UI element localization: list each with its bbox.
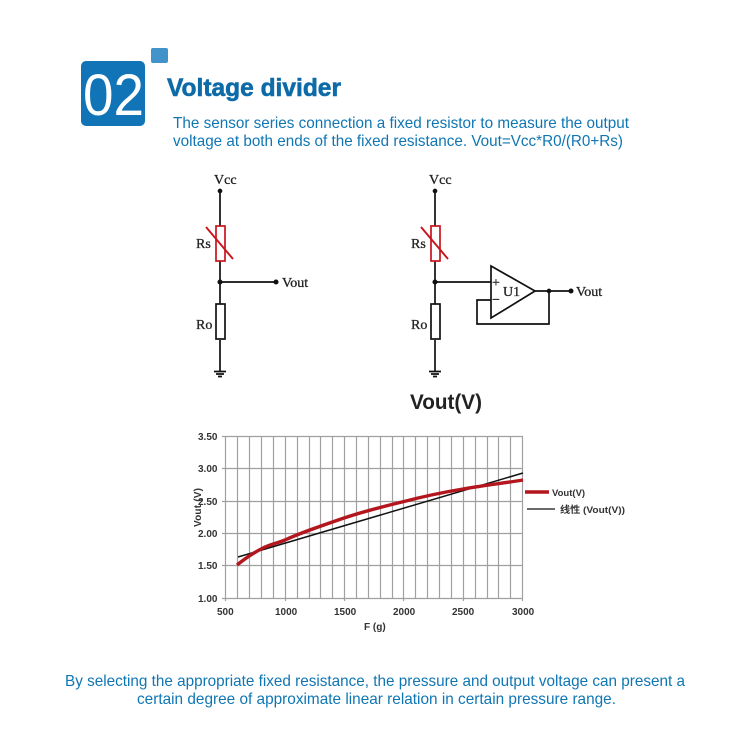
x axis labels: 2000 <box>393 607 416 618</box>
legend: 线性 (Vout(V)) <box>560 504 625 516</box>
circuit: buffered divider with op amp <box>411 173 602 376</box>
labels: Rs <box>196 237 211 252</box>
y axis labels: 3.00 <box>198 464 218 475</box>
y axis labels: 1.00 <box>198 594 218 605</box>
labels: Ro <box>196 318 212 333</box>
labels: + <box>492 276 500 291</box>
line chart <box>193 432 625 633</box>
labels: Rs <box>411 237 426 252</box>
legend <box>525 488 625 516</box>
x axis labels: 1000 <box>275 607 298 618</box>
x axis labels <box>217 607 535 618</box>
y axis title: Vout (V) <box>193 488 204 527</box>
labels: Vcc <box>214 173 237 188</box>
closing text <box>65 673 685 708</box>
closing text: certain degree of approximate linear relation in certain pressure range. <box>137 691 616 708</box>
legend: Vout(V) <box>552 488 585 499</box>
y axis labels: 2.00 <box>198 529 218 540</box>
circuit: basic divider <box>196 173 308 376</box>
labels: Vout <box>282 276 308 291</box>
x axis title: F (g) <box>364 622 386 633</box>
labels: − <box>492 293 500 308</box>
y axis labels: 2.50 <box>198 497 218 508</box>
x axis labels: 3000 <box>512 607 535 618</box>
y axis labels: 3.50 <box>198 432 218 443</box>
Vout curve <box>237 480 523 565</box>
intro text: voltage at both ends of the fixed resistance. Vout=Vcc*R0/(R0+Rs) <box>173 133 623 150</box>
intro text <box>173 115 630 150</box>
y axis labels <box>198 432 218 605</box>
x axis labels: 500 <box>217 607 234 618</box>
closing text: By selecting the appropriate fixed resistance, the pressure and output voltage can present a <box>65 673 685 690</box>
x axis labels: 2500 <box>452 607 475 618</box>
labels: Vcc <box>429 173 452 188</box>
header <box>81 48 341 128</box>
labels: U1 <box>503 285 520 300</box>
labels: Vout <box>576 285 602 300</box>
linear trend line <box>238 473 523 557</box>
labels <box>411 173 602 333</box>
grid <box>222 436 523 601</box>
op amp U1 <box>491 266 535 318</box>
x axis labels: 1500 <box>334 607 357 618</box>
icon: small square <box>151 48 168 63</box>
title: Voltage divider <box>167 74 341 102</box>
chart title: Vout(V) <box>410 391 482 414</box>
y axis labels: 1.50 <box>198 561 218 572</box>
resistor Rs <box>421 226 448 261</box>
intro text: The sensor series connection a fixed resistor to measure the output <box>173 115 630 132</box>
number badge: 02 <box>83 63 144 128</box>
labels <box>196 173 308 333</box>
resistor Rs <box>206 226 233 261</box>
labels: Ro <box>411 318 427 333</box>
